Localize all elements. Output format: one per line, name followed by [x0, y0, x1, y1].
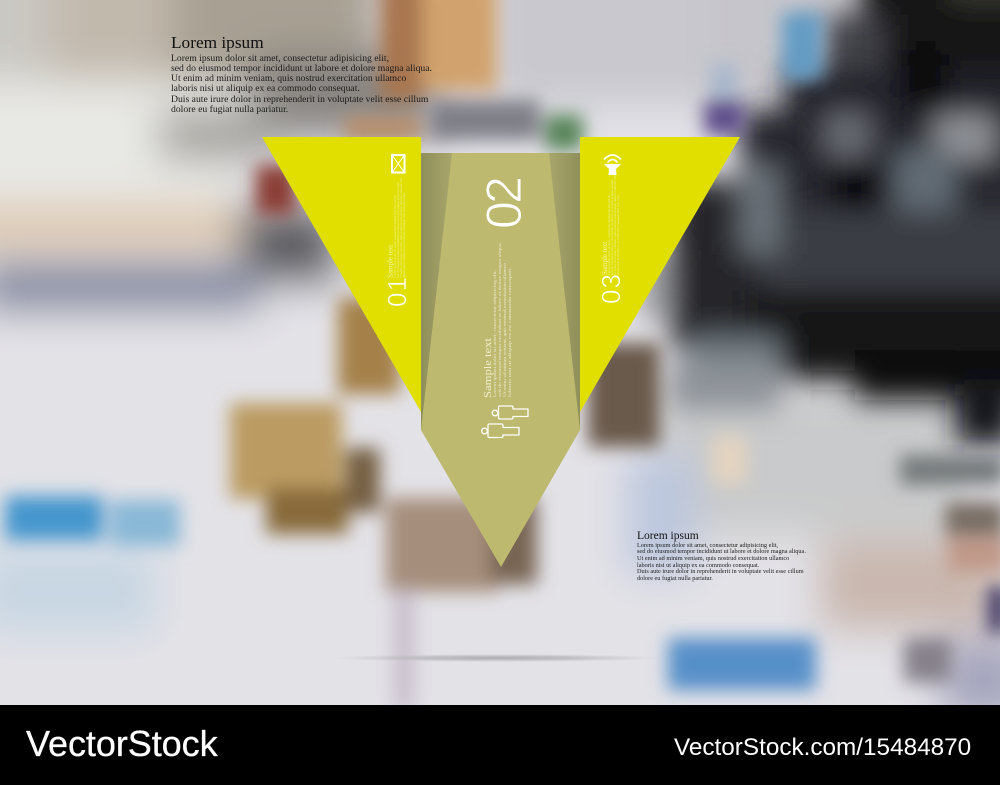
image id: VectorStock.com/15484870 — [674, 734, 971, 761]
heading: bottom right: Lorem ipsum — [637, 530, 699, 542]
body text 03: laboris nisi ut aliquip ex ea commodo consequat duis aute irure — [616, 194, 620, 275]
paragraph: top left: Lorem ipsum dolor sit amet, consectetur adipisicing elit, sed do eiusmod tempor incididunt ut labore et dolore magna aliqua. Ut enim ad minim veniam, quis nostrud exercitation ullamco laboris nisi ut aliquip ex ea commodo consequat. Duis aute irure dolor in reprehenderit in voluptate velit esse cillum dolore eu fugiat nulla pariatur. — [171, 52, 432, 115]
brand name: VectorStock — [26, 723, 218, 764]
label: sample text 03: Sample text — [601, 242, 609, 275]
body text 02 — [493, 242, 512, 397]
body text 03: Ut enim ad minim veniam, quis nostrud exercitation ullamco laboris nisi — [613, 175, 618, 275]
number 03: 03 — [596, 274, 626, 304]
centre shape — [421, 153, 580, 567]
body text 02: laboris nisi ut aliquip ex ea commodo consequat. — [508, 267, 512, 397]
body text 03: Lorem ipsum dolor sit amet, consectetur adipisicing elit sed do — [607, 194, 612, 275]
paragraph: bottom right: Lorem ipsum dolor sit amet, consectetur adipisicing elit, sed do eiusmod tempor incididunt ut labore et dolore magna aliqua. Ut enim ad minim veniam, quis nostrud exercitation ullamco laboris nisi ut aliquip ex ea commodo consequat. Duis aute irure dolor in reprehenderit in voluptate velit esse cillum dolore eu fugiat nulla pariatur. — [637, 542, 806, 582]
footer: watermark bar — [0, 705, 1000, 785]
left fold shade — [421, 153, 452, 430]
icon: two connector plugs — [482, 406, 528, 438]
icon: envelope — [392, 155, 404, 172]
panel 03: right yellow triangle — [580, 137, 740, 412]
body text 03 — [607, 175, 620, 275]
body text 01: Lorem ipsum dolor sit amet, consectetur adipisicing elit, sed do — [393, 194, 398, 278]
heading: top left: Lorem ipsum — [171, 33, 264, 52]
panel 02: centre olive arrow — [421, 153, 580, 567]
label: sample text 02: Sample text — [483, 338, 494, 398]
text block: top left — [171, 33, 432, 115]
ground shadow — [332, 654, 662, 662]
body text 01: sed do eiusmod tempor incididunt ut labore et dolore magna aliqua ut enim — [396, 181, 400, 278]
body text 01: laboris nisi ut aliquip ex ea commodo consequat, duis aute irure dolor — [402, 193, 407, 278]
number 01: 01 — [382, 277, 412, 307]
icon: speaker signal — [604, 155, 621, 175]
panel 01: left yellow triangle — [262, 137, 421, 412]
body text 02: sed do eiusmod tempor incididunt ut labore et dolore magna aliqua. — [498, 242, 502, 397]
body text 01: Ut enim ad minim veniam, quis nostrud exercitation ullamco laboris nisi — [399, 178, 404, 278]
label: sample text 01: Sample text — [386, 245, 394, 278]
body text 02: Lorem ipsum dolor sit amet, consectetur adipisicing elit, — [493, 270, 498, 397]
body text 01 — [393, 178, 407, 278]
body text 03: sed do eiusmod tempor incididunt ut labore et dolore magna aliqua — [610, 179, 614, 275]
number 02: 02 — [476, 176, 532, 229]
text block: bottom right — [637, 530, 806, 582]
body text 02: Ut enim ad minim veniam, quis nostrud exercitation ullamco — [503, 263, 508, 397]
right fold shade — [549, 153, 580, 430]
